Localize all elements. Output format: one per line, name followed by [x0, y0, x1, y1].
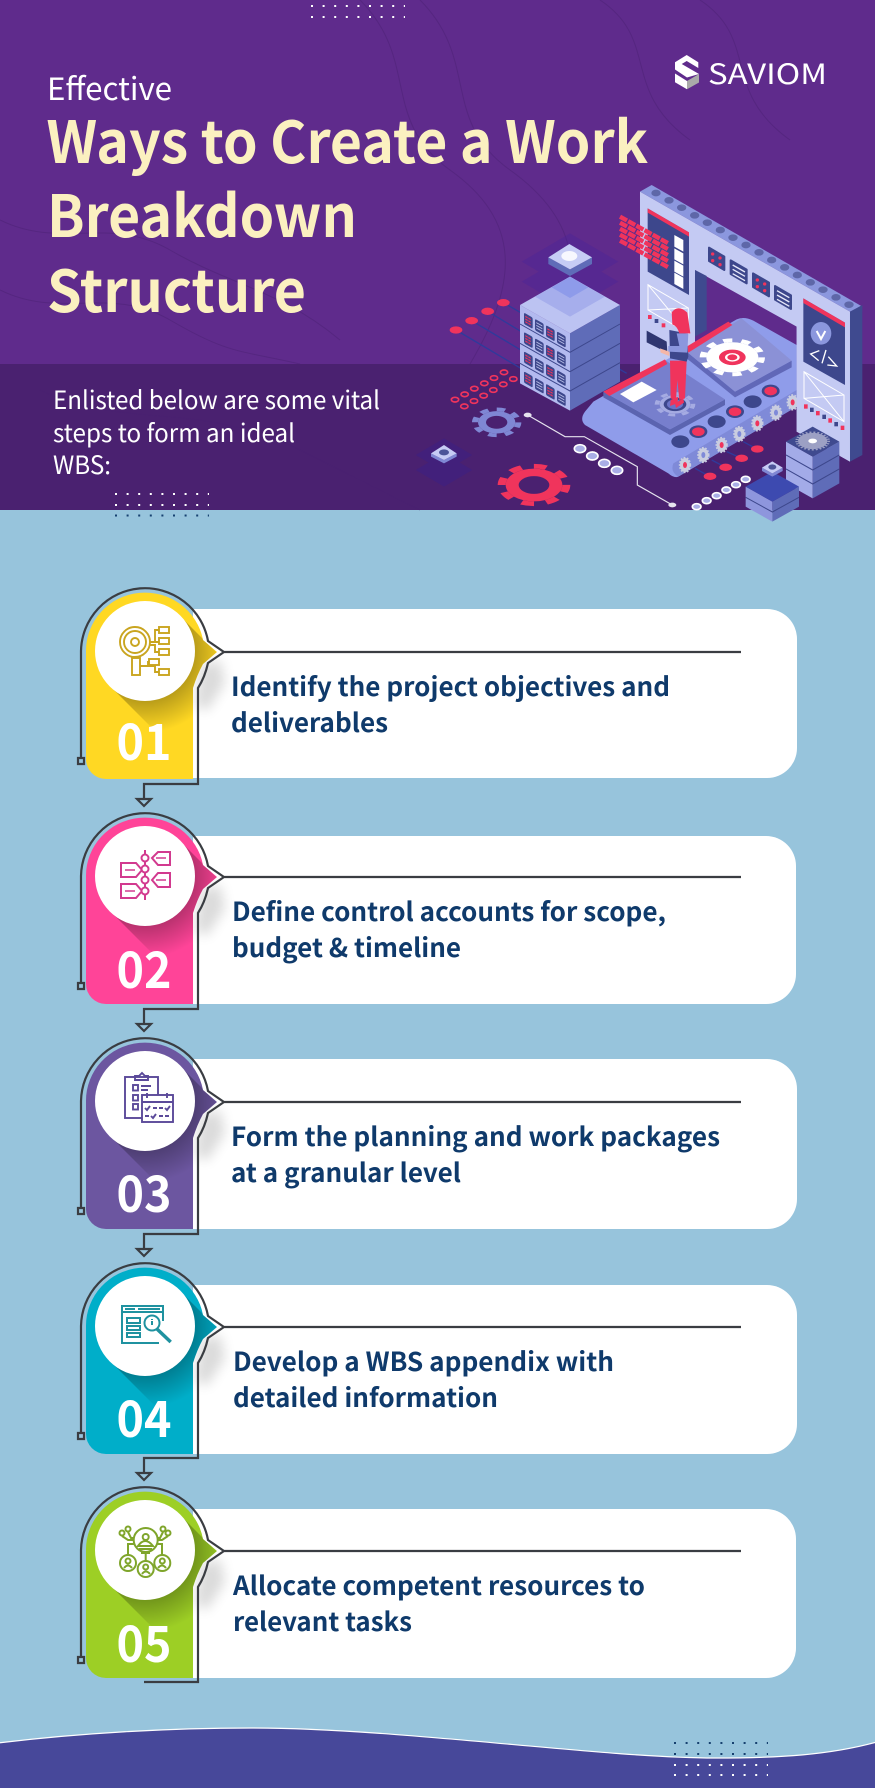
icon circle: [95, 1500, 195, 1600]
step text: at a granular level: [231, 1153, 461, 1190]
number: 04: [116, 1380, 172, 1452]
step 2: [78, 813, 796, 1031]
logo: Saviom: [675, 53, 827, 93]
long shadow: [114, 1520, 216, 1626]
dot grid footer: [674, 1743, 768, 1775]
card shadow: [195, 884, 225, 936]
number: 01: [116, 703, 172, 775]
icon: browser with magnifier: [122, 1306, 171, 1343]
isometric illustration: server, conveyor machine and gears: [416, 185, 862, 522]
card shadow: [195, 659, 225, 711]
subtitle: Enlisted below are some vital: [53, 381, 380, 417]
header banner: [0, 0, 875, 510]
icon: bulb and people: [120, 1526, 170, 1577]
color tab: [86, 1492, 217, 1678]
icon: magnifier and tree: [120, 627, 169, 675]
step 4: [78, 1263, 797, 1480]
step text: Form the planning and work packages: [231, 1117, 720, 1154]
step text: [232, 1566, 645, 1639]
subtitle: [53, 381, 380, 482]
dot grid top: [311, 6, 405, 17]
title: Ways to Create a Work: [46, 96, 648, 180]
title: Structure: [47, 245, 306, 329]
outline connector: [78, 1263, 741, 1480]
step text: deliverables: [231, 703, 388, 740]
color tab: [86, 593, 217, 779]
title: Breakdown: [47, 170, 357, 254]
card shadow: [195, 1334, 225, 1386]
outline connector: [78, 1038, 741, 1256]
step text: Allocate competent resources to: [232, 1566, 645, 1603]
outline connector: [78, 1487, 741, 1682]
step text: Identify the project objectives and: [231, 667, 670, 704]
step 1: [78, 588, 797, 806]
step text: budget & timeline: [232, 928, 461, 965]
long shadow: [114, 1070, 216, 1176]
long shadow: [114, 846, 216, 952]
subtitle: steps to form an ideal: [53, 414, 295, 450]
step 5: [78, 1487, 796, 1685]
step text: relevant tasks: [233, 1602, 412, 1639]
step text: Develop a WBS appendix with: [233, 1342, 614, 1379]
title: [46, 96, 648, 329]
icon circle: [95, 601, 195, 701]
number: 02: [116, 931, 172, 1003]
color tab: [86, 1268, 217, 1454]
card shadow: [195, 1558, 225, 1610]
outline connector: [78, 813, 741, 1031]
icon: clipboard and calendar: [125, 1073, 173, 1122]
long shadow: [114, 1296, 216, 1402]
icon circle: [95, 1051, 195, 1151]
step text: [231, 667, 670, 740]
outline connector: [78, 588, 741, 806]
step text: Define control accounts for scope,: [232, 892, 666, 929]
step text: [232, 892, 666, 965]
title small: Effective: Effective: [47, 64, 172, 109]
color tab: [86, 1043, 217, 1229]
logo: Saviom: SAVIOM: [708, 53, 827, 93]
number: 03: [116, 1155, 172, 1227]
step text: [233, 1342, 614, 1415]
number: 05: [116, 1605, 172, 1677]
long shadow: [114, 620, 216, 727]
card shadow: [195, 1109, 225, 1161]
step text: detailed information: [233, 1378, 498, 1415]
icon circle: [95, 1276, 195, 1376]
step 3: [78, 1038, 797, 1256]
color tab: [86, 818, 217, 1004]
icon circle: [95, 826, 195, 926]
subtitle: WBS:: [53, 446, 111, 482]
step text: [231, 1117, 720, 1190]
footer wave: [0, 1728, 875, 1788]
icon: tags on a line: [121, 850, 170, 900]
dot grid below subtitle: [115, 494, 209, 516]
